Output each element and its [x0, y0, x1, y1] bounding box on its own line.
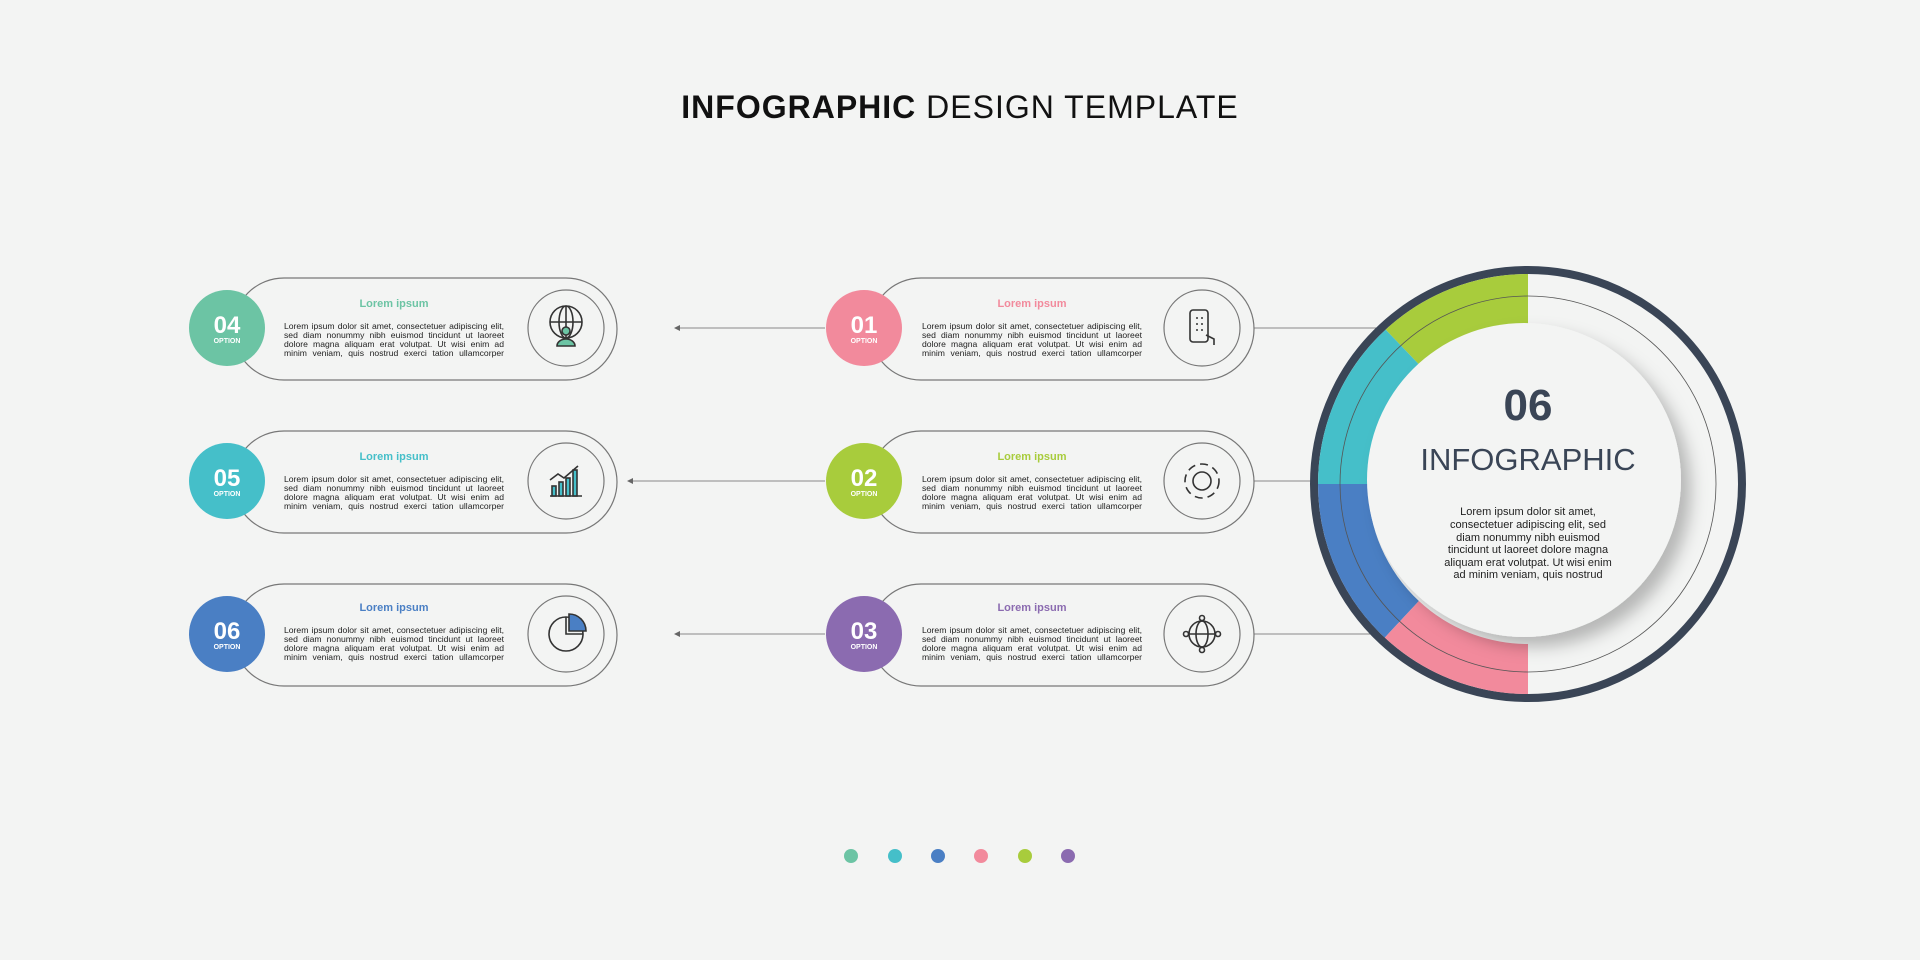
number circles: 06: [214, 618, 240, 645]
number circles: 02: [851, 465, 877, 492]
number circles: OPTION: [851, 338, 877, 345]
text: Lorem ipsum dolor sit amet, consectetuer adipiscing elit, sed diam nonummy nibh euismod tincidunt ut laoreet dolore magna aliquam erat volutpat. Ut wisi enim ad minim veniam, quis nostrud exerci tation ullamcorper: [284, 474, 504, 511]
title: INFOGRAPHIC DESIGN TEMPLATE: [681, 89, 1239, 125]
dots: [844, 849, 1075, 863]
panel text: 02: [922, 451, 1142, 511]
center text: diam nonummy nibh euismod: [1456, 532, 1600, 544]
number circles: OPTION: [851, 491, 877, 498]
panel text: 05: [284, 451, 504, 511]
number circles: OPTION: [214, 491, 240, 498]
text: Lorem ipsum: [359, 298, 429, 310]
text: Lorem ipsum dolor sit amet, consectetuer adipiscing elit, sed diam nonummy nibh euismod tincidunt ut laoreet dolore magna aliquam erat volutpat. Ut wisi enim ad minim veniam, quis nostrud exerci tation ullamcorper: [284, 625, 504, 662]
text: Lorem ipsum: [997, 451, 1067, 463]
panel text: 03: [922, 602, 1142, 662]
number circles: 03: [851, 618, 877, 645]
center text: consectetuer adipiscing elit, sed: [1450, 519, 1606, 531]
connector lines: [630, 328, 1380, 634]
number circles: 05: [214, 465, 240, 492]
panel text: 01: [922, 298, 1142, 358]
number circles: OPTION: [214, 338, 240, 345]
number circles: OPTION: [851, 644, 877, 651]
center text: [1420, 381, 1636, 581]
arrowheads: [627, 325, 680, 637]
center text: ad minim veniam, quis nostrud: [1453, 569, 1603, 581]
text: Lorem ipsum: [997, 602, 1067, 614]
center text: INFOGRAPHIC: [1420, 442, 1636, 477]
text: Lorem ipsum dolor sit amet, consectetuer adipiscing elit, sed diam nonummy nibh euismod tincidunt ut laoreet dolore magna aliquam erat volutpat. Ut wisi enim ad minim veniam, quis nostrud exerci tation ullamcorper: [922, 321, 1142, 358]
number circles: 01: [851, 312, 877, 339]
number circles: OPTION: [214, 644, 240, 651]
text: Lorem ipsum: [359, 602, 429, 614]
number circles: [189, 290, 902, 672]
text: Lorem ipsum dolor sit amet, consectetuer adipiscing elit, sed diam nonummy nibh euismod tincidunt ut laoreet dolore magna aliquam erat volutpat. Ut wisi enim ad minim veniam, quis nostrud exerci tation ullamcorper: [922, 625, 1142, 662]
center text: 06: [1504, 381, 1552, 430]
panel text: 06: [284, 602, 504, 662]
text: Lorem ipsum dolor sit amet, consectetuer adipiscing elit, sed diam nonummy nibh euismod tincidunt ut laoreet dolore magna aliquam erat volutpat. Ut wisi enim ad minim veniam, quis nostrud exerci tation ullamcorper: [284, 321, 504, 358]
big circle: [1314, 270, 1742, 698]
text: Lorem ipsum dolor sit amet, consectetuer adipiscing elit, sed diam nonummy nibh euismod tincidunt ut laoreet dolore magna aliquam erat volutpat. Ut wisi enim ad minim veniam, quis nostrud exerci tation ullamcorper: [922, 474, 1142, 511]
center text: Lorem ipsum dolor sit amet,: [1460, 506, 1596, 518]
number circles: 04: [214, 312, 241, 339]
pills: [233, 278, 1254, 686]
text: Lorem ipsum: [359, 451, 429, 463]
icons: [549, 306, 1220, 652]
panel text: 04: [284, 298, 504, 358]
text: Lorem ipsum: [997, 298, 1067, 310]
center text: aliquam erat volutpat. Ut wisi enim: [1444, 557, 1612, 569]
center text: tincidunt ut laoreet dolore magna: [1448, 544, 1609, 556]
